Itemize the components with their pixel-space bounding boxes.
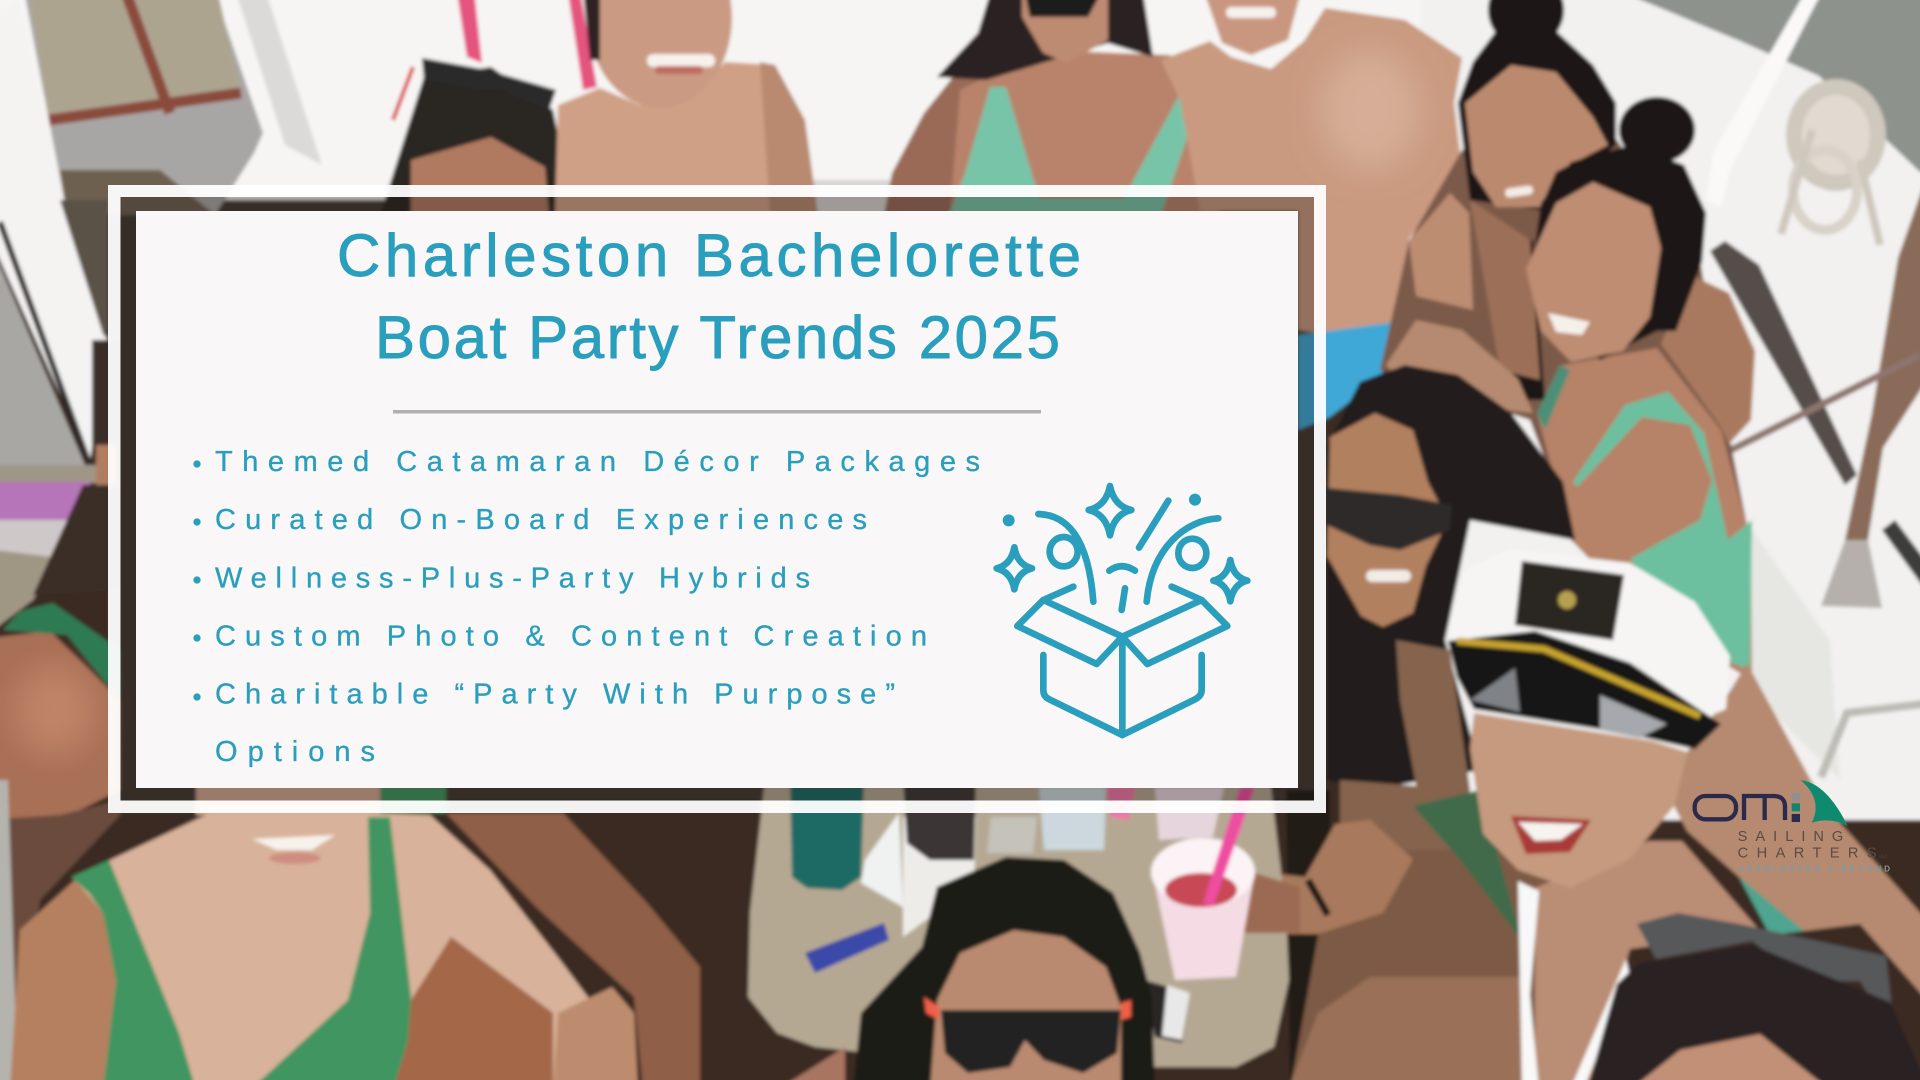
bullet list of trends: Themed Catamaran Décor Packages <box>215 446 980 478</box>
woman in green swimsuit bottom left <box>10 780 700 1080</box>
woman in captain hat <box>1448 549 1760 1080</box>
man with blue shorts <box>1161 0 1462 430</box>
bullet list of trends: Charitable “Party With Purpose” <box>215 678 895 710</box>
bullet list of trends: Wellness-Plus-Party Hybrids <box>215 562 810 594</box>
logo: OMI Sailing Charters <box>1695 780 1890 874</box>
logo: OMI Sailing Charters: CHARTERS <box>1738 846 1877 862</box>
divider <box>393 410 1041 414</box>
pink drink cup <box>1151 787 1300 980</box>
bullet list of trends: Custom Photo & Content Creation <box>215 620 927 652</box>
boat deck and water on the right <box>1400 0 1920 820</box>
title: Boat Party Trends 2025 <box>375 304 1060 371</box>
woman with green swimsuit and bun <box>1526 97 1755 680</box>
woman at the bottom centre with sunglasses <box>777 857 1155 1080</box>
backing shadow between the two women <box>1380 130 1750 540</box>
hair and sunglasses bottom right <box>1587 913 1920 1080</box>
shirtless man <box>555 0 818 215</box>
woman in green swimsuit <box>884 0 1220 215</box>
icon: open gift box with confetti <box>997 486 1247 735</box>
logo: OMI Sailing Charters: SAILING <box>1738 829 1843 845</box>
bullet list of trends: Options <box>215 736 375 768</box>
title: Charleston Bachelorette <box>337 222 1081 289</box>
boat interior top left <box>0 0 1420 1080</box>
logo: OMI Sailing Charters: LLC <box>1879 854 1889 859</box>
woman with hair bun top right <box>1386 0 1616 413</box>
title <box>337 222 1081 371</box>
panel frame: translucent white border <box>108 185 1326 813</box>
bullet list of trends <box>194 446 980 768</box>
logo: OMI Sailing Charters: CHARLESTON & BEYOND <box>1738 865 1890 874</box>
woman with dark hair and sunglasses <box>1326 365 1575 790</box>
panel: white content card <box>136 211 1298 788</box>
woman with sunglasses on head <box>380 58 575 215</box>
dark inner band of the frame <box>120 197 1314 800</box>
table with drinks <box>748 780 1289 1067</box>
arm holding cup and lower bodies <box>1240 640 1920 1080</box>
bullet list of trends: Curated On-Board Experiences <box>215 504 867 536</box>
